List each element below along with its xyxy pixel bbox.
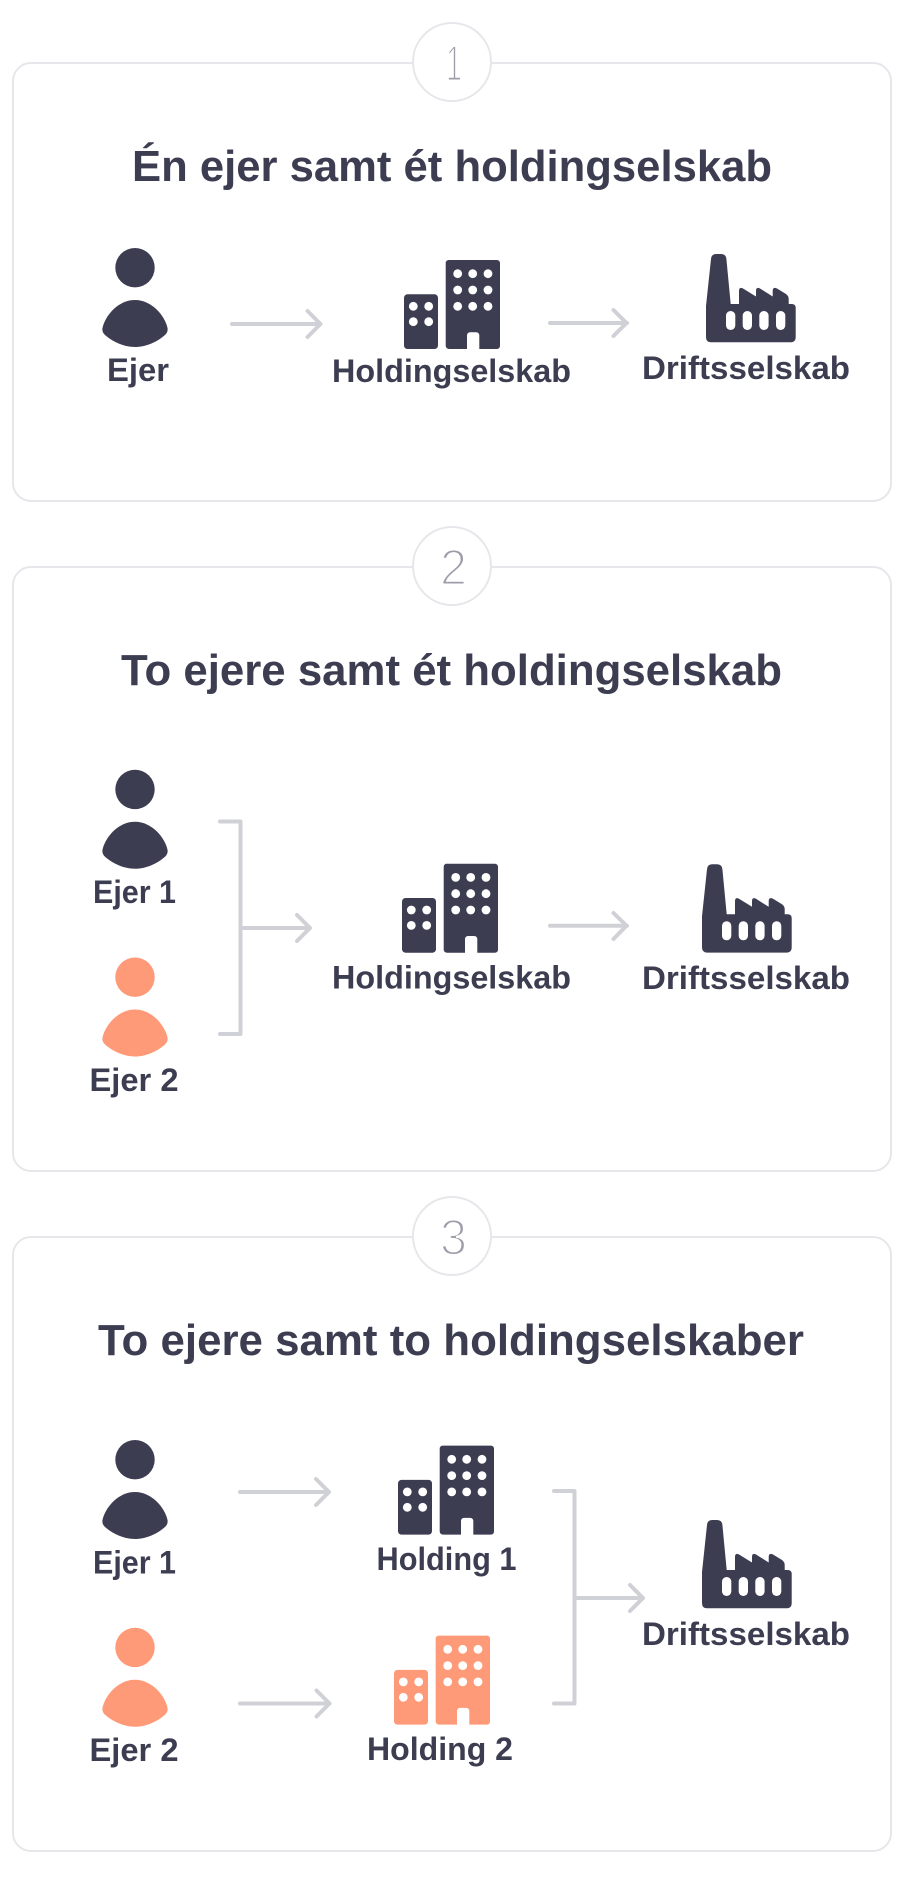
panel: scenario 2 [13,527,891,1171]
number badge 1: 1 [446,36,462,92]
arrow: holding to operating [550,310,627,336]
label: Holdingselskab: Holdingselskab [332,353,571,389]
icon: owner 1 [102,770,168,869]
icon: owner [102,248,168,347]
label: Driftsselskab: Driftsselskab [642,1616,850,1652]
arrow: holding to operating [550,913,627,939]
number badge 3 [413,1197,491,1275]
label: Driftsselskab: Driftsselskab [642,960,850,996]
arrow: owner to holding [232,311,320,337]
number badge 2: 2 [440,540,467,596]
heading 3: To ejere samt to holdingselskaber [98,1316,804,1365]
icon: factory [702,1520,792,1608]
icon: owner 1 [102,1440,168,1539]
icon: owner 2 [102,958,168,1056]
icon: factory [706,254,796,342]
label: Ejer 1: Ejer 1 [93,1544,176,1580]
panel: scenario 1 [13,23,891,501]
panel: scenario 3 [13,1197,891,1851]
label: Holding 2: Holding 2 [367,1731,513,1767]
panel 1 border [13,63,891,501]
bracket arrow: holdings to operating [554,1491,643,1704]
label: Driftsselskab: Driftsselskab [642,350,850,386]
heading 2: To ejere samt ét holdingselskab [121,646,782,695]
panel 3 border [13,1237,891,1851]
arrow: owner 1 to holding 1 [240,1479,329,1505]
label: Ejer 2: Ejer 2 [90,1732,178,1768]
label: Holding 1: Holding 1 [376,1541,516,1577]
icon: holding company [404,260,500,349]
number badge 1 [413,23,491,101]
icon: owner 2 [102,1628,168,1727]
icon: holding 2 [394,1636,490,1725]
panel 2 border [13,567,891,1171]
number badge 3: 3 [440,1210,467,1266]
icon: holding 1 [398,1446,494,1535]
bracket arrow: owners to holding [220,822,310,1034]
label: Holdingselskab: Holdingselskab [332,960,571,996]
heading 1: Én ejer samt ét holdingselskab [132,141,772,191]
label: Ejer 1: Ejer 1 [93,874,176,910]
icon: factory [702,864,792,953]
label: Ejer 2: Ejer 2 [90,1062,178,1098]
number badge 2 [413,527,491,605]
label: Ejer: Ejer [107,352,169,388]
icon: holding company [402,864,498,953]
arrow: owner 2 to holding 2 [240,1690,330,1716]
